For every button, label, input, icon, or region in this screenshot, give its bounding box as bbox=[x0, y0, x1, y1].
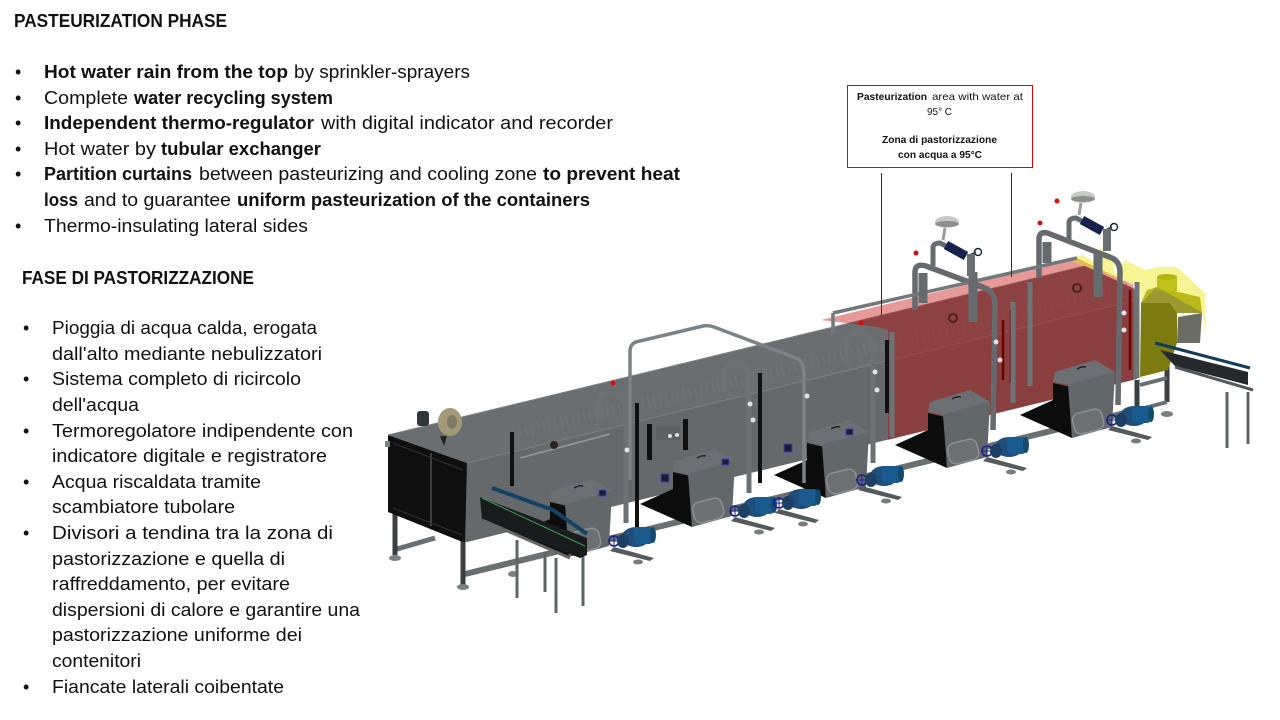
text block: English bullet list: tubular exchanger bbox=[161, 139, 321, 159]
callout: pasteurization area: Pasteurization bbox=[857, 91, 927, 103]
text block: Italian bullet list: • bbox=[23, 472, 29, 492]
title: Italian heading: FASE DI PASTORIZZAZIONE bbox=[22, 268, 254, 288]
text block: Italian bullet list: Acqua riscaldata tramite bbox=[52, 472, 261, 492]
callout: pasteurization area: con acqua a 95°C bbox=[898, 149, 982, 161]
yellow zone overlay bbox=[1067, 248, 1205, 332]
title: English heading: PASTEURIZATION PHASE bbox=[14, 11, 227, 31]
text block: Italian bullet list: pastorizzazione e quella di bbox=[52, 549, 285, 569]
text block: English bullet list: • bbox=[15, 88, 21, 108]
text block: Italian bullet list: Fiancate laterali coibentate bbox=[52, 677, 284, 697]
right conveyor bbox=[1155, 343, 1253, 448]
callout: pasteurization area: area with water at bbox=[932, 91, 1023, 103]
machine body: long side face bbox=[463, 300, 1137, 543]
pumps bbox=[609, 406, 1154, 564]
text block: English bullet list: • bbox=[15, 113, 21, 133]
text block: Italian bullet list: Termoregolatore indipendente con bbox=[52, 421, 353, 441]
machine frame and legs bbox=[389, 330, 1173, 590]
text block: Italian bullet list: • bbox=[23, 421, 29, 441]
callout: pasteurization area bbox=[848, 86, 1032, 168]
text block: English bullet list: and to guarantee bbox=[84, 190, 231, 210]
text block: Italian bullet list: Sistema completo di ricircolo bbox=[52, 369, 301, 389]
text block: Italian bullet list: pastorizzazione uniforme dei bbox=[52, 625, 302, 645]
text block: English bullet list: Hot water by bbox=[44, 139, 156, 159]
text block: English bullet list: • bbox=[15, 62, 21, 82]
text block: English bullet list: Partition curtains bbox=[44, 164, 192, 184]
text block: Italian bullet list: • bbox=[23, 677, 29, 697]
text block: Italian bullet list: • bbox=[23, 523, 29, 543]
heating hopper at right end bbox=[1140, 274, 1202, 377]
control panel bbox=[520, 419, 688, 460]
text block: Italian bullet list: dell'acqua bbox=[52, 395, 140, 415]
text block: English bullet list: between pasteurizing and cooling zone bbox=[199, 164, 537, 184]
text block: English bullet list: • bbox=[15, 139, 21, 159]
text block: English bullet list: loss bbox=[44, 190, 78, 210]
machine mesh band bbox=[520, 285, 1135, 433]
machine: body edges bbox=[388, 266, 1137, 463]
text block: Italian bullet list: dispersioni di calore e garantire una bbox=[52, 600, 361, 620]
tanks bbox=[517, 360, 1115, 557]
text block: Italian bullet list: contenitori bbox=[52, 651, 141, 671]
text block: English bullet list: Complete bbox=[44, 88, 128, 108]
temperature and pressure gauges bbox=[610, 198, 1126, 452]
callout: pasteurization area: Zona di pastorizzazione bbox=[882, 134, 997, 146]
text block: English bullet list: to prevent heat bbox=[543, 164, 680, 184]
text block: Italian bullet list: dall'alto mediante nebulizzatori bbox=[52, 344, 322, 364]
machine: pasteurizer tunnel bbox=[385, 191, 1253, 613]
text block: Italian bullet list: • bbox=[23, 318, 29, 338]
text block: Italian bullet list: Pioggia di acqua calda, erogata bbox=[52, 318, 318, 338]
inspection windows bbox=[599, 429, 853, 496]
text block: Italian bullet list: scambiatore tubolare bbox=[52, 497, 235, 517]
control valves bbox=[933, 191, 1118, 276]
text block: Italian bullet list: • bbox=[23, 369, 29, 389]
text block: English bullet list: uniform pasteurization of the containers bbox=[237, 190, 590, 210]
text block: English bullet list: Independent thermo-regulator bbox=[44, 113, 314, 133]
callout: pasteurization area: 95° C bbox=[927, 106, 952, 118]
blower fan bbox=[417, 408, 462, 446]
text block: English bullet list: by sprinkler-sprayers bbox=[294, 62, 470, 82]
text block: Italian bullet list bbox=[23, 318, 361, 697]
text block: Italian bullet list: Divisori a tendina tra la zona di bbox=[52, 523, 333, 543]
machine body: top face bbox=[388, 266, 1137, 463]
text block: English bullet list: Hot water rain from the top bbox=[44, 62, 288, 82]
text block: Italian bullet list: raffreddamento, per evitare bbox=[52, 574, 290, 594]
text block: Italian bullet list: indicatore digitale e registratore bbox=[52, 446, 327, 466]
left conveyor bbox=[480, 488, 587, 613]
text block: English bullet list bbox=[15, 62, 680, 236]
text block: English bullet list: • bbox=[15, 164, 21, 184]
text block: English bullet list: Thermo-insulating lateral sides bbox=[44, 216, 308, 236]
machine body: black end door bbox=[385, 435, 467, 543]
leader lines from callout bbox=[882, 173, 1012, 316]
pipes and vertical posts bbox=[512, 233, 1137, 527]
text block: English bullet list: • bbox=[15, 216, 21, 236]
text block: English bullet list: with digital indicator and recorder bbox=[320, 113, 613, 133]
text block: English bullet list: water recycling system bbox=[133, 88, 333, 108]
pasteurization zone red overlay bbox=[821, 258, 1133, 440]
